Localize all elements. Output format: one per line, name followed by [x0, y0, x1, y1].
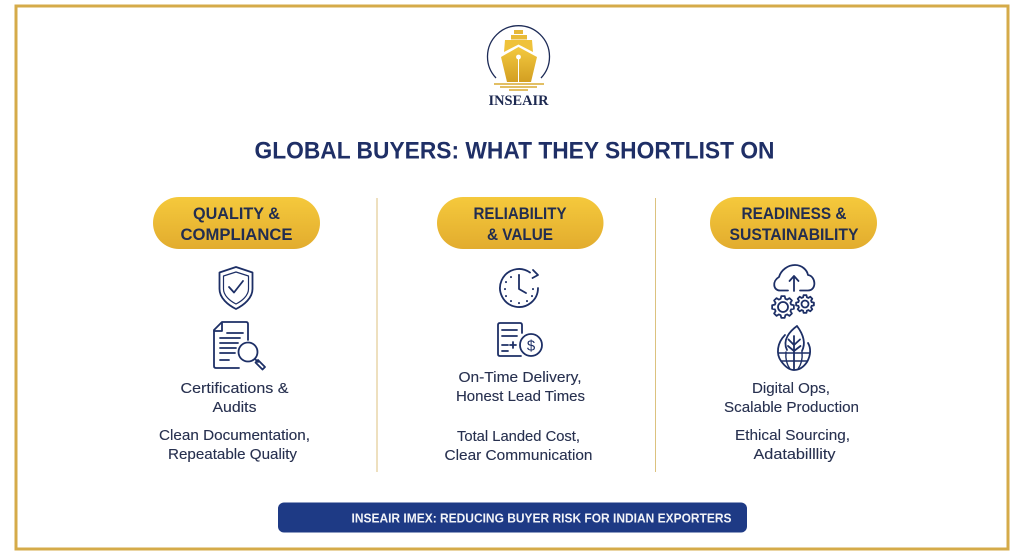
- pill heading: readiness and sustainability: SUSTAINABILITY: [730, 226, 858, 244]
- pill heading: quality and compliance: QUALITY &: [193, 205, 280, 223]
- logo ring: [488, 26, 550, 78]
- text: certifications and audits: Certifications &: [180, 380, 288, 397]
- footer banner: [278, 502, 747, 532]
- icon: shield check: [220, 267, 252, 309]
- text: on-time delivery, honest lead times: [456, 369, 585, 405]
- column divider 2: [655, 198, 656, 472]
- pill heading: reliability and value: & VALUE: [487, 226, 553, 244]
- panel: readiness and sustainability: [710, 197, 877, 463]
- column divider 1: [376, 198, 378, 472]
- text: total landed cost, clear communication: Total Landed Cost,: [457, 428, 580, 445]
- logo: [488, 26, 550, 109]
- text: on-time delivery, honest lead times: Honest Lead Times: [456, 388, 585, 405]
- pill heading: readiness and sustainability: [710, 197, 877, 249]
- panel: quality and compliance: [153, 197, 320, 463]
- pill heading: quality and compliance: [153, 197, 320, 249]
- text: ethical sourcing, adatabilllity: Adatabilllity: [754, 446, 836, 463]
- panel: reliability and value: [437, 197, 604, 464]
- text: certifications and audits: [180, 380, 288, 416]
- text: total landed cost, clear communication: Clear Communication: [444, 447, 592, 464]
- icon: clock: [500, 269, 538, 307]
- title: GLOBAL BUYERS: WHAT THEY SHORTLIST ON: [254, 138, 774, 164]
- text: clean documentation, repeatable quality: Clean Documentation,: [159, 427, 310, 444]
- text: digital ops, scalable production: [724, 380, 859, 416]
- text: digital ops, scalable production: Digital Ops,: [752, 380, 830, 397]
- text: ethical sourcing, adatabilllity: [735, 427, 850, 463]
- footer banner: INSEAIR IMEX: REDUCING BUYER RISK FOR INDIAN EXPORTERS: [352, 510, 732, 526]
- logo ship: [494, 30, 544, 90]
- icon: invoice with dollar coin: [498, 323, 542, 356]
- icon: cloud upload and gears: [772, 265, 814, 318]
- text: clean documentation, repeatable quality: [159, 427, 310, 463]
- text: total landed cost, clear communication: [444, 428, 592, 464]
- text: on-time delivery, honest lead times: On-Time Delivery,: [458, 369, 582, 386]
- text: ethical sourcing, adatabilllity: Ethical Sourcing,: [735, 427, 850, 444]
- logo wordmark: INSEAIR: [488, 93, 549, 109]
- icon: invoice with dollar coin: $: [527, 338, 536, 354]
- pill heading: reliability and value: [437, 197, 604, 249]
- icon: document with magnifier: [214, 322, 265, 370]
- pill heading: reliability and value: RELIABILITY: [474, 205, 566, 223]
- text: digital ops, scalable production: Scalable Production: [724, 399, 859, 416]
- text: clean documentation, repeatable quality: Repeatable Quality: [168, 446, 297, 463]
- text: certifications and audits: Audits: [212, 399, 257, 416]
- pill heading: readiness and sustainability: READINESS &: [742, 205, 847, 223]
- pill heading: quality and compliance: COMPLIANCE: [180, 226, 292, 244]
- icon: leaf and globe: [778, 326, 810, 370]
